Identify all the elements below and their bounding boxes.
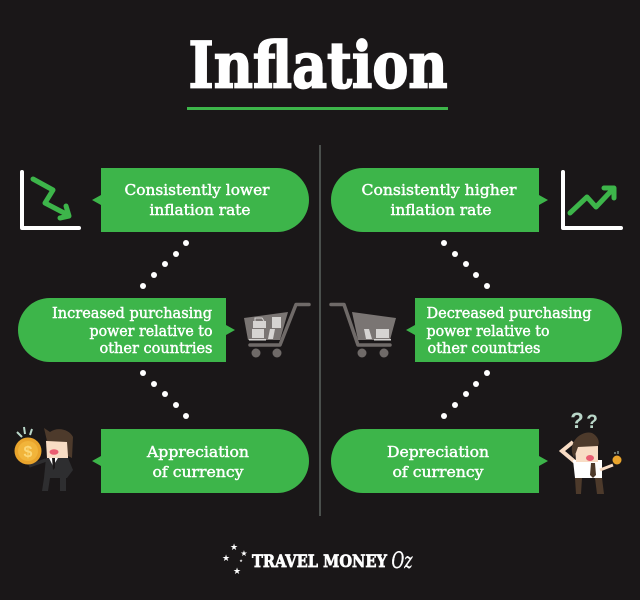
icon: cart right xyxy=(331,304,396,358)
icon: full cart left xyxy=(244,304,309,358)
icon: businessman with coin xyxy=(14,427,73,491)
logo: Travel Money Oz: ★ xyxy=(240,549,248,558)
icon: confused businessman xyxy=(562,408,622,494)
panel: appreciation bubble: of currency xyxy=(152,463,244,481)
panel: decreased purchasing power bubble: power relative to xyxy=(426,322,550,340)
panel: decreased purchasing power bubble: other countries xyxy=(428,339,540,357)
panel: appreciation bubble: Appreciation xyxy=(146,443,249,461)
panel: increased purchasing power bubble: Increased purchasing xyxy=(52,304,212,322)
panel: increased purchasing power bubble: other countries xyxy=(100,339,212,357)
dotted connector: bottom right xyxy=(441,370,490,419)
panel: lower inflation bubble: inflation rate xyxy=(150,201,251,219)
panel: lower inflation bubble: Consistently lower xyxy=(124,181,270,199)
panel: depreciation bubble xyxy=(331,429,548,493)
logo: Travel Money Oz: ★ xyxy=(239,558,243,563)
panel: higher inflation bubble: inflation rate xyxy=(390,201,492,219)
icon: businessman with coin: $ xyxy=(24,444,33,461)
dotted connector: top left xyxy=(140,240,189,289)
icon: confused businessman: ? xyxy=(570,408,584,433)
logo: Travel Money Oz: TRAVEL MONEY xyxy=(252,552,388,572)
icon: rising chart xyxy=(563,172,621,228)
dotted connector: bottom left xyxy=(140,370,189,419)
panel: increased purchasing power bubble xyxy=(18,298,235,362)
logo: Travel Money Oz: ★ xyxy=(230,542,238,552)
title: Inflation xyxy=(188,28,448,104)
panel: higher inflation bubble xyxy=(331,168,548,232)
icon: falling chart xyxy=(22,172,79,228)
panel: depreciation bubble: Depreciation xyxy=(387,443,489,461)
panel: lower inflation bubble xyxy=(92,168,309,232)
icon: confused businessman: ? xyxy=(586,412,598,433)
panel: depreciation bubble: of currency xyxy=(392,463,484,481)
logo: Travel Money Oz: ★ xyxy=(222,553,230,563)
panel: appreciation bubble xyxy=(92,429,309,493)
panel: decreased purchasing power bubble: Decreased purchasing xyxy=(426,304,592,322)
logo: Travel Money Oz xyxy=(222,542,413,576)
panel: increased purchasing power bubble: power relative to xyxy=(90,322,212,340)
logo: Travel Money Oz: Oz xyxy=(392,549,413,574)
panel: decreased purchasing power bubble xyxy=(406,298,622,362)
dotted connector: top right xyxy=(441,240,490,289)
panel: higher inflation bubble: Consistently higher xyxy=(362,181,517,199)
logo: Travel Money Oz: ★ xyxy=(233,566,241,576)
